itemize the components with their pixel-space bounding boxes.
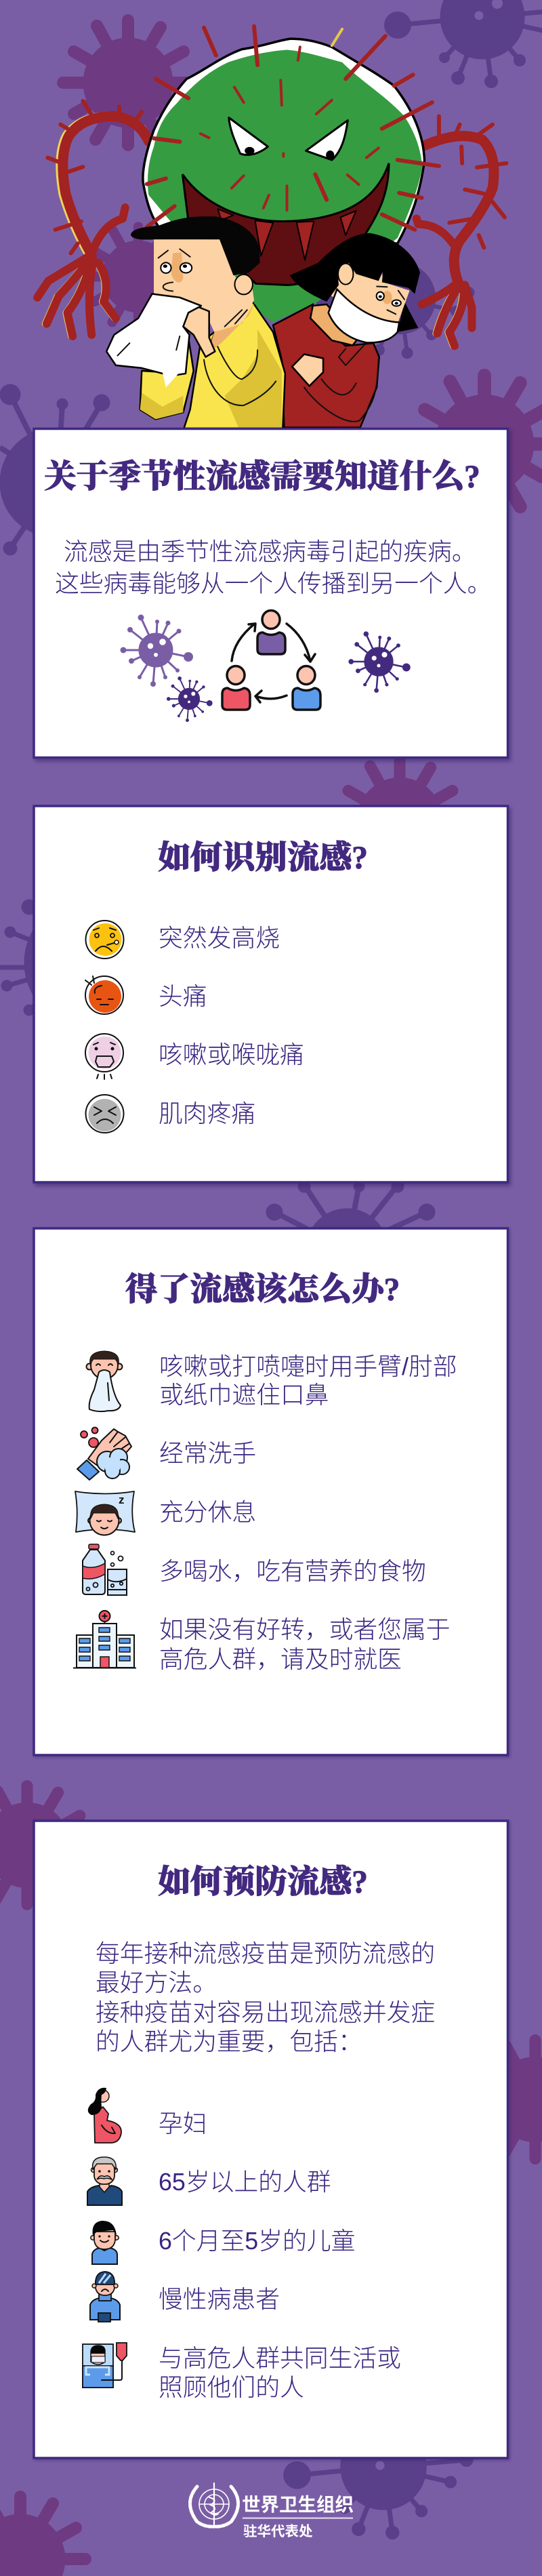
virus head green xyxy=(148,49,422,323)
icon: right virus xyxy=(348,631,411,693)
advice: seek care: 高危人群，请及时就医 xyxy=(159,1646,402,1673)
man jacket xyxy=(184,302,285,428)
logo: WHO China office: 驻华代表处 xyxy=(243,2524,313,2539)
advice: wash hands xyxy=(77,1428,256,1480)
advice: seek care xyxy=(73,1611,451,1673)
body text: 这些病毒能够从一个人传播到另一个人。 xyxy=(55,570,491,597)
heading: 如何识别流感? xyxy=(158,840,368,876)
icon: WHO emblem xyxy=(190,2483,238,2527)
icon: patient with bandages xyxy=(90,2272,120,2322)
icon: water bottle and glass xyxy=(83,1544,127,1595)
girl body xyxy=(273,233,420,428)
icon: sleeping on pillow: z xyxy=(119,1493,125,1506)
icon: fever face xyxy=(85,921,123,959)
heading: 如何预防流感? xyxy=(158,1864,368,1900)
group: carers: 照顾他们的人 xyxy=(159,2374,304,2401)
icon: person with tissue xyxy=(87,1351,122,1411)
icon: sleeping on pillow xyxy=(75,1491,135,1535)
man tissue xyxy=(106,294,201,376)
symptom: muscle ache: 肌肉疼痛 xyxy=(159,1100,255,1127)
man neck xyxy=(207,302,255,354)
icon: coughing face xyxy=(85,1034,123,1079)
heading: 得了流感该怎么办? xyxy=(125,1272,400,1308)
man sleeve xyxy=(140,338,194,419)
symptom: cough or sore throat xyxy=(85,1034,304,1079)
virus teeth xyxy=(217,209,356,260)
advice: seek care: 如果没有好转，或者您属于 xyxy=(159,1616,451,1643)
advice: cover mouth xyxy=(87,1351,457,1411)
group: chronic disease patients: 慢性病患者 xyxy=(159,2286,280,2313)
girl mask xyxy=(329,289,399,342)
symptom: fever: 突然发高烧 xyxy=(159,925,280,952)
panel: about seasonal flu xyxy=(34,428,508,758)
virus right arm xyxy=(417,116,506,346)
logo: WHO China office xyxy=(190,2483,354,2539)
virus mouth xyxy=(182,163,389,285)
icon: hospital xyxy=(73,1611,136,1668)
girl face xyxy=(329,264,410,324)
advice: wash hands: 经常洗手 xyxy=(159,1440,256,1467)
icon: patient in bed with IV xyxy=(83,2343,127,2388)
icon: aching face xyxy=(85,1095,123,1133)
body text xyxy=(96,1940,435,2055)
virus eyes xyxy=(229,117,348,160)
group: chronic disease patients xyxy=(90,2272,280,2322)
icon: elderly man xyxy=(87,2157,122,2205)
body text xyxy=(55,538,491,597)
virus head xyxy=(143,39,425,243)
group: young children xyxy=(91,2221,355,2264)
virus left arm xyxy=(37,101,148,336)
hero illustration: flu virus monster and two people xyxy=(37,26,506,428)
icon: pregnant woman xyxy=(88,2088,121,2143)
wordmark: 世界卫生组织 xyxy=(242,2494,354,2515)
symptom: muscle ache xyxy=(85,1095,255,1133)
group: pregnant women xyxy=(88,2088,207,2143)
panel: how to prevent flu xyxy=(34,1821,508,2458)
virus red spikes xyxy=(147,26,439,230)
man hand xyxy=(183,307,215,357)
icon: child xyxy=(91,2221,119,2264)
girl eyes xyxy=(377,292,384,300)
heading: 关于季节性流感需要知道什么? xyxy=(44,459,480,495)
girl back hair xyxy=(398,302,418,332)
group: pregnant women: 孕妇 xyxy=(159,2110,207,2137)
panel: what to do with flu xyxy=(34,1228,508,1755)
man face xyxy=(154,239,254,332)
advice: rest xyxy=(75,1491,256,1535)
group: carers: 与高危人群共同生活或 xyxy=(159,2345,401,2372)
advice: cover mouth: 或纸巾遮住口鼻 xyxy=(159,1382,329,1409)
icon: headache face xyxy=(85,976,123,1014)
man eyes xyxy=(161,262,171,273)
icon: small virus xyxy=(167,677,213,722)
man hair xyxy=(131,216,260,275)
body text: 每年接种流感疫苗是预防流感的 xyxy=(96,1940,435,1967)
girl hair xyxy=(290,233,420,302)
advice: drink water and eat xyxy=(83,1544,426,1595)
advice: drink water and eat: 多喝水，吃有营养的食物 xyxy=(159,1558,426,1585)
girl fist xyxy=(292,354,323,386)
body text: 流感是由季节性流感病毒引起的疾病。 xyxy=(64,538,476,565)
icon: transmission cycle xyxy=(222,610,320,710)
symptom: cough or sore throat: 咳嗽或喉咙痛 xyxy=(159,1041,304,1068)
advice: cover mouth: 咳嗽或打喷嚏时用手臂/肘部 xyxy=(159,1353,457,1380)
panel: how to recognise flu xyxy=(34,806,508,1182)
body text: 最好方法。 xyxy=(96,1969,217,1996)
symptom: headache xyxy=(85,976,207,1014)
body text: 的人群尤为重要，包括： xyxy=(96,2028,362,2055)
group: carers xyxy=(83,2343,401,2401)
group: 65 and older: 65岁以上的人群 xyxy=(159,2169,331,2196)
group: young children: 6个月至5岁的儿童 xyxy=(159,2228,355,2255)
group: 65 and older xyxy=(87,2157,331,2205)
icon: washing hands xyxy=(77,1428,131,1480)
advice: rest: 充分休息 xyxy=(159,1499,256,1526)
body text: 接种疫苗对容易出现流感并发症 xyxy=(96,1999,435,2026)
man xyxy=(106,216,285,428)
icon: large virus xyxy=(121,614,193,687)
symptom: headache: 头痛 xyxy=(159,983,207,1010)
symptom: fever xyxy=(85,921,280,959)
